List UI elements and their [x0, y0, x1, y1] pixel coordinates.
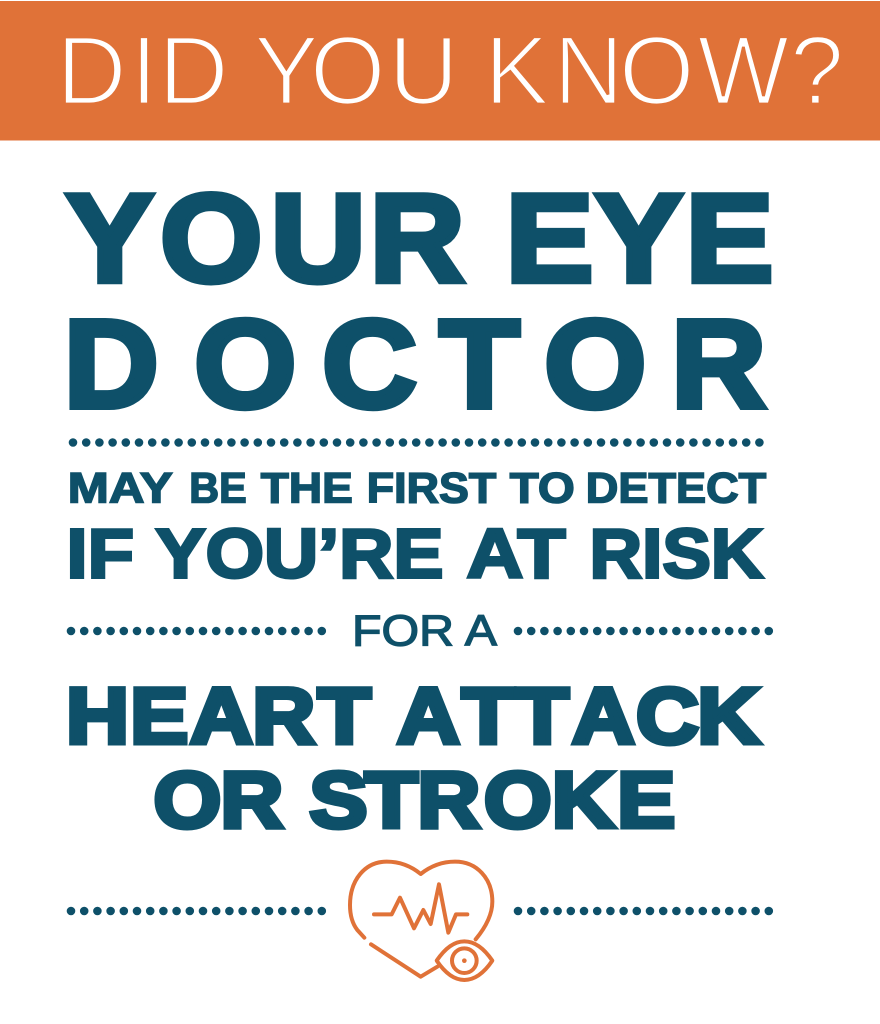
subheading: if you're at risk [66, 514, 764, 592]
dotted divider: bottom left [67, 907, 326, 915]
headline: doctor: DOCTOR [64, 295, 766, 434]
icon: heart with pulse and eye [350, 862, 492, 980]
subheading: may be the first to detect: TO [510, 464, 575, 512]
dotted divider: top [69, 438, 764, 447]
subheading: may be the first to detect: FIRST [367, 464, 496, 512]
subheading: if you're at risk: RISK [590, 514, 764, 592]
dotted divider: bottom right [514, 907, 773, 915]
headline: your eye: YOUR EYE [66, 169, 773, 309]
headline: heart attack: HEART ATTACK [66, 671, 760, 760]
subheading: may be the first to detect: MAY [68, 464, 173, 512]
subheading: if you're at risk: YOU’RE [156, 514, 444, 592]
dotted divider: middle right [514, 627, 773, 635]
subheading: if you're at risk: AT [466, 514, 566, 592]
subheading: may be the first to detect: DETECT [586, 464, 766, 512]
header banner [0, 1, 880, 140]
banner title: DID YOU KNOW? [56, 16, 844, 125]
dotted divider: middle left [67, 627, 326, 635]
subheading: may be the first to detect [68, 464, 766, 512]
subheading: may be the first to detect: THE [261, 464, 353, 512]
headline: or stroke: OR STROKE [154, 756, 675, 844]
subheading: may be the first to detect: BE [189, 464, 247, 512]
subheading: if you're at risk: IF [66, 514, 134, 592]
label: for a: FOR A [352, 606, 498, 655]
